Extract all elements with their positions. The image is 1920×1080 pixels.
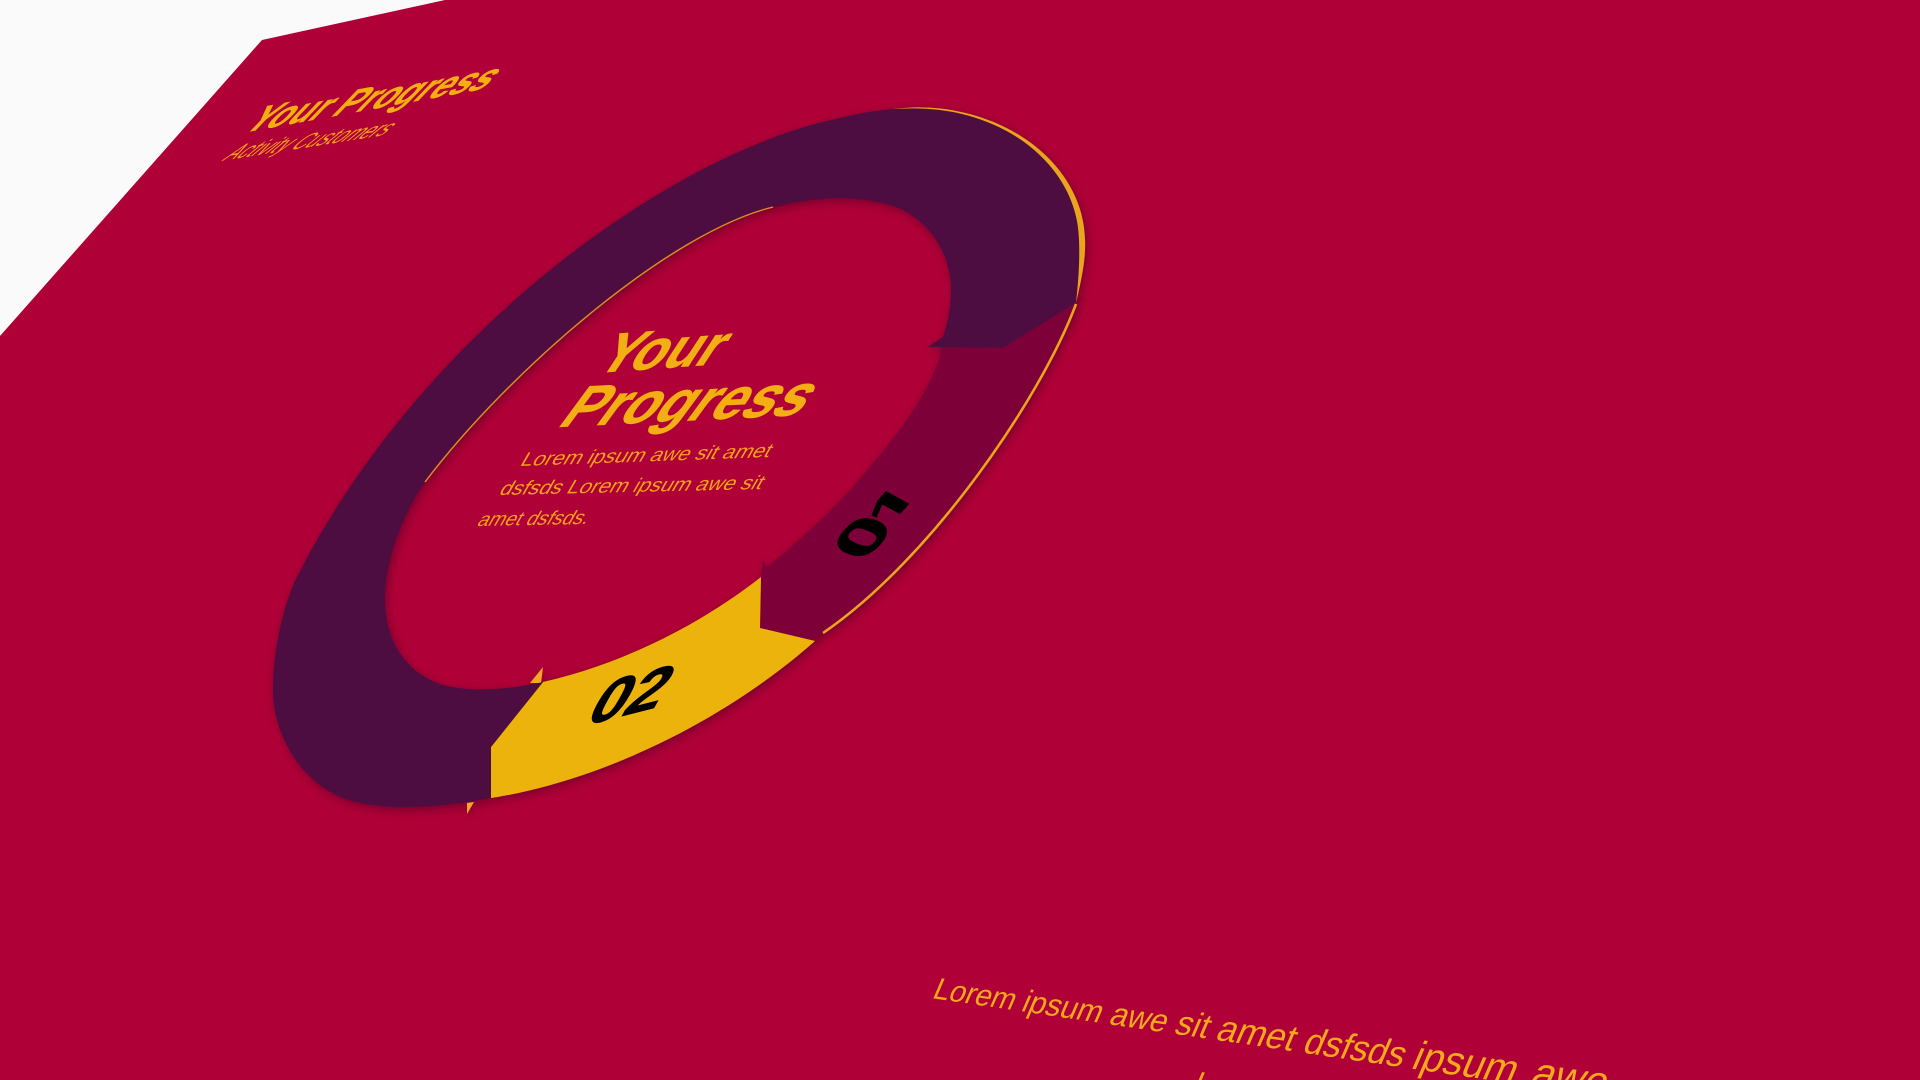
segment 03: purple arrow ring [273,108,1085,807]
segment 01: dark crimson arrow [760,300,1078,640]
header: title and subtitle [214,53,518,167]
center heading line 2: Progress [547,362,838,440]
caption line 1: awe [1105,996,1176,1039]
ring chart [273,107,1085,814]
digit 1: 1 [855,475,933,537]
caption line 1: sit [1170,1005,1218,1046]
number 01 [838,491,918,556]
header subtitle: Activity Customers [214,115,408,167]
inner gold rim [425,207,773,482]
description line 3: amet dsfsds. [473,507,596,531]
description line 1: Lorem ipsum awe sit amet [516,439,778,470]
digit 0: 0 [817,507,907,567]
segment 02: yellow arrow [491,577,815,798]
center heading line 1: Your [585,314,747,386]
bottom caption [927,962,1618,1080]
ring segments with soft shadow [273,107,1085,814]
white corner outside the tilted slide [0,0,445,336]
small gold arrow tips [467,667,543,814]
number 02: 02 [575,650,688,741]
header title: Your Progress [233,53,518,141]
caption line 1: dsfsds [1298,1021,1415,1075]
description line 2: dsfsds Lorem ipsum awe sit [495,471,770,499]
caption line 1: Lorem [928,973,1023,1017]
caption line 1: ipsum [1017,984,1110,1029]
outer gold rim, lower right [823,304,1076,633]
caption line 1: amet [1211,1008,1305,1059]
outer gold rim, upper right [890,107,1085,303]
center heading and description [473,314,838,531]
